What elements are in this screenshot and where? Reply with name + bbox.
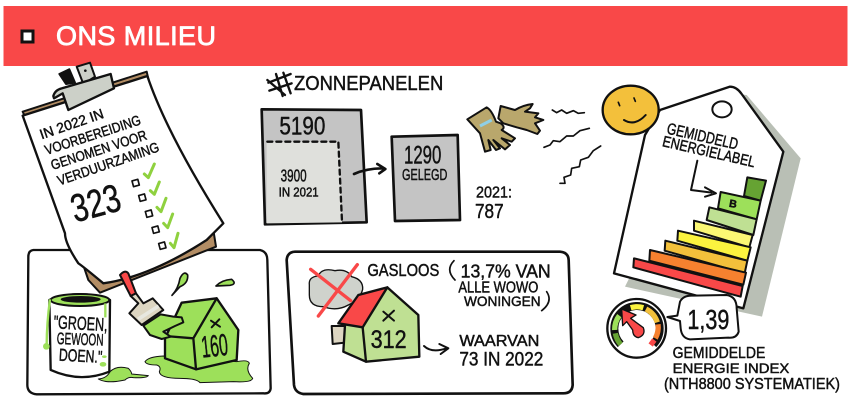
icon: cross bbox=[311, 265, 357, 316]
label bbox=[664, 345, 840, 393]
house number: 160 bbox=[200, 328, 230, 365]
solar waves bbox=[544, 110, 601, 183]
callout bbox=[667, 295, 739, 339]
icon: gas cloud bbox=[309, 270, 363, 309]
heading: energielabel: GEMIDDELD bbox=[665, 121, 740, 154]
title: ONS MILIEU bbox=[56, 21, 216, 51]
label 2021: 2021: bbox=[476, 184, 512, 201]
number 3900: 3900 bbox=[281, 166, 307, 186]
can label text bbox=[53, 311, 108, 367]
panel: gasloos bbox=[287, 252, 573, 394]
number 323: 323 bbox=[66, 176, 126, 231]
icon: solar hash bbox=[267, 73, 292, 96]
icon: gauge bbox=[607, 299, 666, 358]
energy index bbox=[607, 295, 840, 393]
heading text: ZONNEPANELEN bbox=[294, 72, 443, 95]
paint puddle bbox=[98, 356, 253, 383]
clipboard bbox=[23, 63, 223, 293]
icon: header square bbox=[22, 31, 33, 42]
paint can bbox=[43, 294, 110, 377]
clipboard text bbox=[37, 105, 161, 189]
energy label tag bbox=[603, 86, 801, 317]
clipboard text: IN 2022 IN bbox=[37, 105, 106, 142]
panel: installed bbox=[392, 135, 460, 221]
label in 2021: IN 2021 bbox=[279, 186, 319, 200]
header banner bbox=[4, 6, 848, 66]
number 5190: 5190 bbox=[279, 113, 325, 141]
label gasloos: ALLE WOWO bbox=[458, 280, 538, 297]
heading: energielabel: ENERGIELABEL bbox=[661, 133, 757, 171]
clipboard text: VOORBEREIDING bbox=[43, 112, 143, 158]
tag shadow bbox=[625, 93, 801, 317]
number 787: 787 bbox=[475, 200, 504, 223]
number 1290: 1290 bbox=[404, 141, 441, 169]
value: 1,39 bbox=[687, 304, 729, 335]
label gasloos: 13,7% VAN bbox=[461, 260, 551, 281]
house bbox=[332, 287, 419, 362]
clipboard text: VERDUURZAMING bbox=[55, 139, 161, 189]
house green bbox=[165, 273, 238, 369]
label gasloos bbox=[367, 260, 551, 311]
number 312: 312 bbox=[371, 326, 407, 354]
paint brush bbox=[120, 272, 183, 339]
tag bbox=[614, 87, 783, 308]
label gelegd: GELEGD bbox=[402, 167, 447, 184]
checklist bbox=[132, 164, 178, 249]
arrow bbox=[354, 164, 385, 174]
letter B: B bbox=[728, 198, 738, 211]
clip bbox=[53, 63, 114, 110]
label gasloos: GASLOOS bbox=[367, 260, 439, 280]
heading: energielabel bbox=[661, 121, 757, 171]
arrow bbox=[424, 344, 448, 354]
clipboard text: GENOMEN VOOR bbox=[49, 127, 149, 173]
icon: gloves and waves bbox=[467, 104, 601, 183]
label gasloos: WONINGEN bbox=[464, 293, 541, 309]
can label text: GEWOON bbox=[57, 329, 104, 350]
panel: solar totals bbox=[262, 109, 512, 224]
clipboard board bbox=[23, 72, 216, 293]
can label text: "GROEN, bbox=[53, 311, 108, 335]
label waarvan: WAARVAN bbox=[459, 333, 539, 350]
arrow bbox=[691, 161, 716, 197]
label: ENERGIE INDEX bbox=[673, 360, 790, 376]
paper bbox=[23, 76, 223, 283]
label 73 in 2022: 73 IN 2022 bbox=[459, 350, 543, 371]
icon: sun bbox=[603, 86, 659, 134]
label: GEMIDDELDE bbox=[673, 345, 765, 362]
energy bars bbox=[633, 177, 766, 297]
paint drips bbox=[172, 273, 234, 295]
heading: zonnepanelen bbox=[267, 72, 443, 96]
can label text: DOEN." bbox=[58, 345, 103, 367]
panel: groen gewoon doen bbox=[27, 250, 271, 394]
